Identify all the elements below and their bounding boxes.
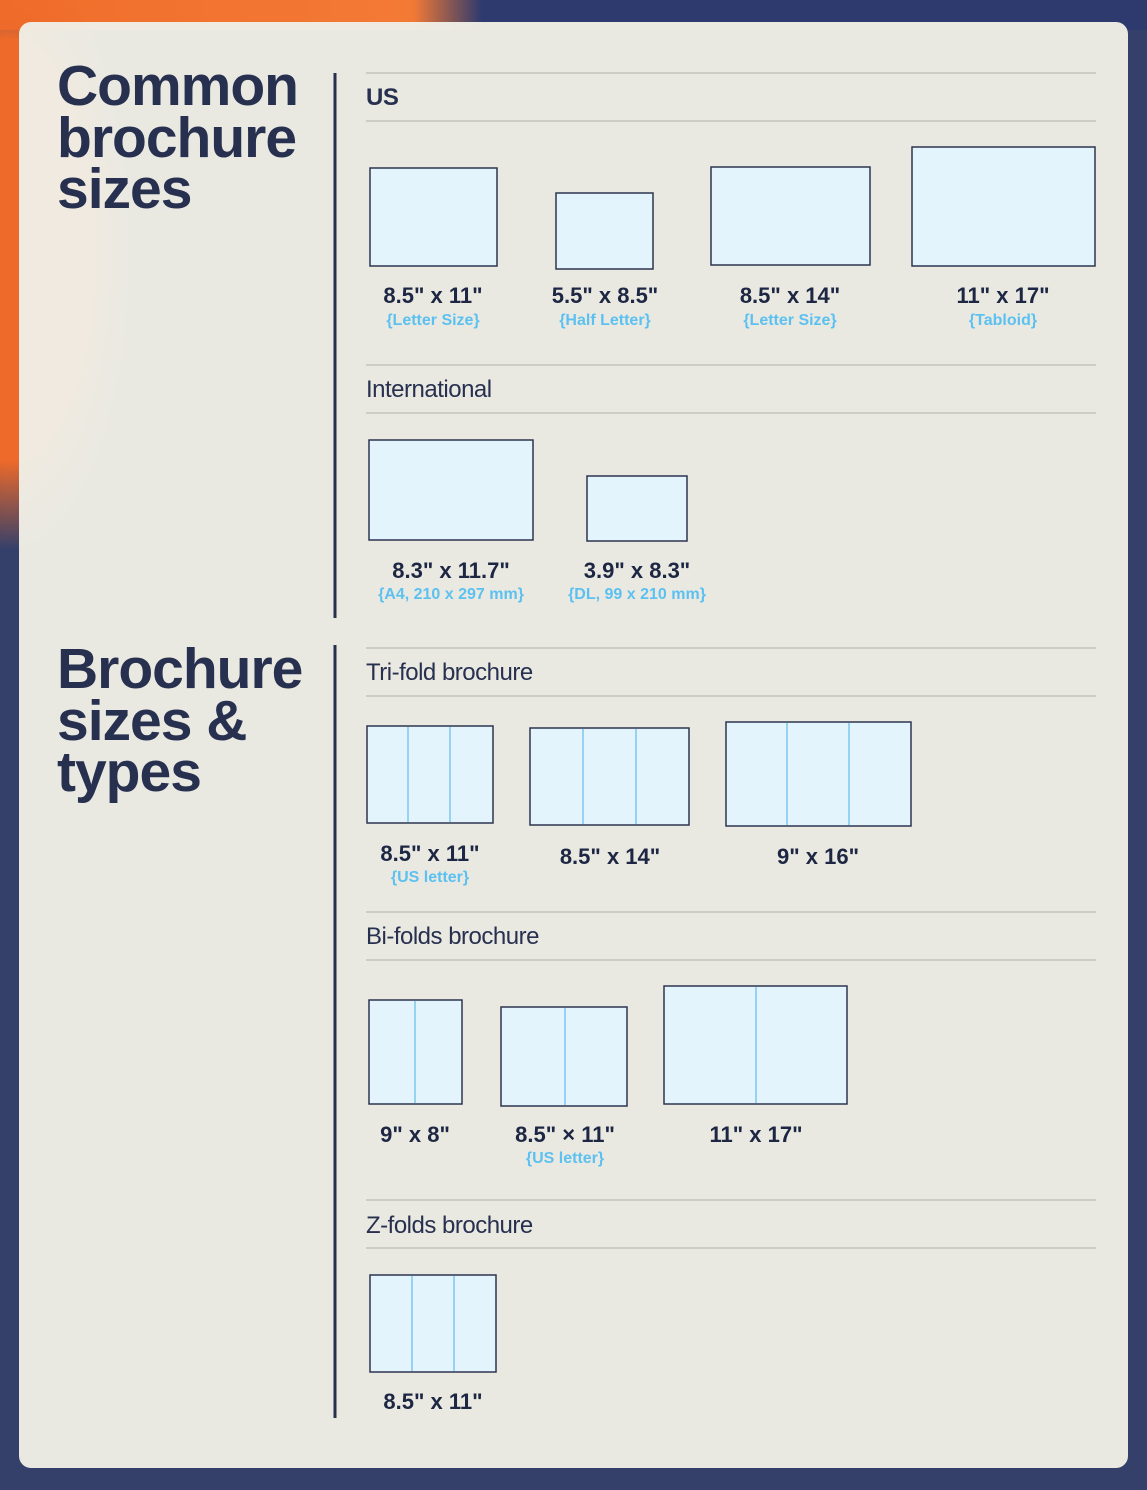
section headings: International <box>366 376 492 403</box>
subtitle labels: {Letter Size} <box>386 312 480 329</box>
size boxes <box>367 147 1095 1372</box>
section headings: Tri-fold brochure <box>366 659 533 686</box>
subtitle labels: {Tabloid} <box>969 312 1037 329</box>
size labels: 3.9" x 8.3" <box>584 558 690 583</box>
subtitle labels: {Half Letter} <box>559 312 651 329</box>
size labels: 9" x 16" <box>777 844 859 869</box>
subtitle labels: {A4, 210 x 297 mm} <box>378 586 524 603</box>
size labels: 8.5" x 11" <box>380 841 480 866</box>
title: Common brochure sizes: brochure <box>57 106 296 170</box>
size labels: 8.5" x 14" <box>740 283 840 308</box>
title: Common brochure sizes <box>57 54 298 221</box>
subtitle labels <box>378 312 1037 1167</box>
title: Common brochure sizes: Common <box>57 54 298 118</box>
section headings: US <box>366 84 399 111</box>
title: Brochure sizes & types: sizes & <box>57 689 246 753</box>
subtitle labels: {US letter} <box>526 1150 604 1167</box>
section headings: Z-folds brochure <box>366 1212 533 1239</box>
title: Brochure sizes & types <box>57 637 302 804</box>
size labels: 9" x 8" <box>380 1122 450 1147</box>
size labels: 8.5" x 11" <box>383 283 483 308</box>
size labels: 8.3" x 11.7" <box>392 558 510 583</box>
size labels: 11" x 17" <box>709 1122 803 1147</box>
size labels: 8.5" x 14" <box>560 844 660 869</box>
subtitle labels: {US letter} <box>391 869 469 886</box>
subtitle labels: {DL, 99 x 210 mm} <box>568 586 706 603</box>
title: Brochure sizes & types: Brochure <box>57 637 302 701</box>
title: Common brochure sizes: sizes <box>57 157 191 221</box>
section headings: Bi-folds brochure <box>366 923 539 950</box>
size labels: 11" x 17" <box>956 283 1050 308</box>
size labels: 5.5" x 8.5" <box>552 283 658 308</box>
title: Brochure sizes & types: types <box>57 740 201 804</box>
size labels: 8.5" × 11" <box>515 1122 615 1147</box>
fold lines <box>408 723 849 1371</box>
subtitle labels: {Letter Size} <box>743 312 837 329</box>
size labels: 8.5" x 11" <box>383 1389 483 1414</box>
size labels <box>380 283 1050 1414</box>
section headings <box>366 84 539 1239</box>
